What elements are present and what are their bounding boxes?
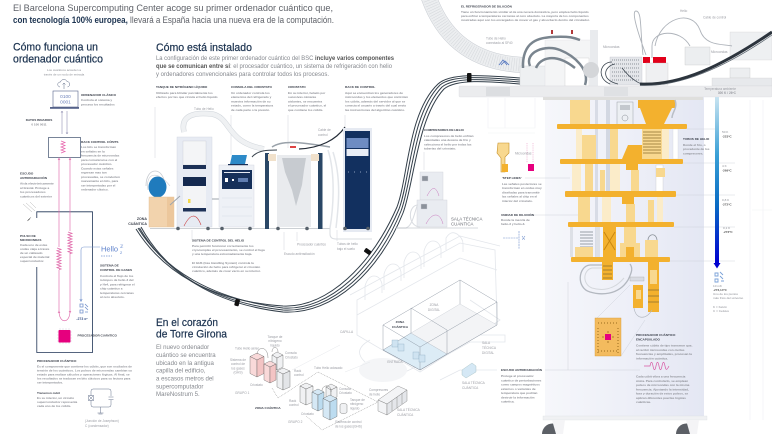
- panel: refrigerador: [428, 0, 772, 434]
- compressors panel: [330, 128, 482, 239]
- iso labels: Sistema de: [230, 358, 246, 362]
- text: refrigerador de dilución: EL REFRIGERADOR DE DILUCIÓN: [461, 4, 512, 8]
- text: escudo: ESCUDO ANTIRRADIACIÓN: [501, 368, 542, 372]
- iso labels: ZONA CUÁNTICA: [255, 405, 281, 410]
- arrows: datos: [61, 111, 68, 134]
- iso labels: Tanque de: [350, 398, 365, 402]
- blue line: hello: [80, 247, 100, 301]
- heading: [156, 317, 228, 340]
- text: procesador encapsulado: fase y duración de estos pulsos, se: [636, 392, 688, 396]
- labels top: Helio: [680, 9, 687, 13]
- label: temperatura ambiente: Temperatura ambiente: [704, 87, 736, 91]
- iso labels: Criostato: [250, 383, 263, 387]
- small labels: Procesador cuántico: [297, 242, 326, 246]
- iso labels: nitrógeno: [268, 339, 282, 343]
- floor: [150, 228, 330, 230]
- label: sistema control helio: circulación de helio para refrigerar el criostato: [192, 265, 260, 269]
- label: rack control cúbits: RACK CONTROL CÚBITS: [81, 140, 118, 144]
- text: refrigerador de dilución: Tiene un funcionamiento similar al de una nevera doméstica, pero emplea helio líquido: [461, 10, 589, 14]
- iso labels: Consola: [285, 351, 297, 355]
- text: entrada: través de un nodo de entrada: [44, 72, 84, 76]
- label: rack de control: microondas y los elementos que controlan: [345, 95, 408, 99]
- iso labels: Compresores: [369, 388, 388, 392]
- label: rack de control: Aquí se encuentran los generadores de: [345, 91, 403, 95]
- iso labels: líquido: [270, 344, 280, 348]
- label: criostato: En su interior, helado por: [288, 91, 326, 95]
- text: procesador encapsulado: ENCAPSULADO: [636, 338, 660, 342]
- label: zona cuántica: CUÁNTICA: [128, 221, 147, 226]
- body: El nuevo ordenador: [156, 344, 209, 351]
- header text: El Barcelona Supercomputing Center acoge su primer ordenador cuántico que,: [13, 3, 333, 14]
- label: rack de control: los cúbits, además del servidor al que se: [345, 99, 405, 103]
- zone labels: SALA: [482, 341, 490, 345]
- band below platform: [543, 97, 703, 100]
- heading: cómo funciona: ordenador cuántico: [13, 54, 103, 66]
- label: sala técnica cuántica: CUÁNTICA: [451, 222, 474, 226]
- label: rack de control: RACK DE CONTROL: [345, 85, 375, 89]
- label: cable de control: control: [318, 133, 328, 137]
- fridge body: [545, 97, 704, 417]
- hello signal: 2: [120, 250, 123, 255]
- label: tubo de helio: Tubo de Helio: [194, 107, 214, 111]
- text: compresores de helio: COMPRESORES DE HELIO: [424, 128, 464, 132]
- label: sistema control gases: y He4, para refrigerar el: [100, 282, 135, 286]
- label: datos binarios: 0 100 0011: [31, 122, 47, 126]
- label: tanque: efectos por las que circula el helio líquido: [156, 95, 218, 99]
- iso labels: de helio: [369, 392, 380, 396]
- temperature labels: [722, 130, 733, 234]
- label: pulso de microondas: especial de material: [20, 255, 50, 259]
- label: consola: muestra información de su: [231, 99, 271, 103]
- text: procesador cuántico: ser interpretados.: [37, 380, 63, 384]
- labels top: Microondas: [603, 45, 620, 49]
- top machinery: [520, 30, 599, 86]
- label: rack control cúbits: para comunicarse con el: [81, 158, 117, 162]
- zone labels: ENTRADA: [387, 360, 403, 364]
- label: pulso de microondas: superconductor.: [20, 259, 44, 263]
- icon: dilución: [503, 231, 525, 249]
- label: rack control cúbits: Cuando estas señales: [81, 166, 114, 170]
- leaders: [292, 345, 370, 372]
- iso labels: los gases: [231, 366, 245, 370]
- panel: torre girona: [156, 233, 505, 430]
- body: supercomputador: [156, 384, 203, 390]
- label: sala técnica cuántica: SALA TÉCNICA: [451, 216, 482, 222]
- text: unidad de dilución: UNIDAD DE DILUCIÓN: [501, 213, 534, 217]
- label: rack de control: las instrucciones del algoritmo cuántico.: [345, 108, 405, 112]
- hello signal: ℤ: [120, 244, 124, 249]
- label: tanque: Utilizado para blindar parcialmente los: [156, 91, 213, 95]
- label: criostato: CRIOSTATO: [288, 85, 306, 89]
- icon: wave: [644, 362, 669, 370]
- label: rack control cúbits: ordenador clásico.: [81, 188, 109, 192]
- small labels: Escudo antirradiación: [284, 252, 315, 256]
- pink microwave lines: [57, 158, 72, 321]
- label: sistema control gases: temperaturas cercanas: [100, 291, 134, 295]
- text: entrada: Los cuánticos acceden a: [47, 68, 81, 72]
- cable bundle: [136, 76, 520, 312]
- label: pulso de microondas: ondas viaja a través: [20, 247, 50, 251]
- background grid: [488, 98, 772, 420]
- text: step lines: las señales al chip en el: [502, 195, 537, 199]
- label: sistema control gases: CONTROL DE GASES: [100, 268, 132, 272]
- body: capilla del edificio,: [156, 368, 206, 374]
- label: rack de control: conecta el usuario a través del cual envía: [345, 104, 406, 108]
- hello signal: [101, 244, 124, 256]
- label: rack control cúbits: procesador cuántico.: [81, 162, 112, 166]
- helium tube: [428, 0, 522, 65]
- text: refrigerador de dilución: mostradas aquí son los encargados de mover el gas y absorberlo dentro del circulador.: [461, 18, 590, 22]
- iso labels: GRUPO 2: [288, 420, 303, 424]
- lower stage: [580, 262, 659, 317]
- icon: frío: [715, 272, 724, 282]
- compressor units: [417, 172, 447, 227]
- small labels: Tubos de helio: [337, 242, 358, 246]
- label: tanque: TANQUE DE NITRÓGENO LÍQUIDO: [156, 85, 207, 89]
- label: consola: elementos del refrigerado y: [231, 95, 272, 99]
- hello signal: Hello: [101, 244, 118, 254]
- temperature labels: -273ºC: [723, 230, 733, 234]
- iso labels: nitrógeno: [350, 402, 364, 406]
- iso labels: Tubo Helio adosado: [314, 366, 343, 370]
- text: step lines: 'STEP LINES': [502, 176, 521, 180]
- iso labels: (GHS): [233, 370, 243, 374]
- body: a escasos metros del: [156, 376, 214, 382]
- iso labels: control: [289, 403, 299, 407]
- leader: [423, 152, 425, 170]
- iso labels: Rack: [289, 399, 296, 403]
- label: ordenador clásico: procesa los resultados: [81, 102, 115, 106]
- label: consola: Un ordenador controla los: [231, 91, 270, 95]
- body: ubicado en la antigua: [156, 360, 215, 367]
- body: cuántico se encuentra: [156, 352, 216, 359]
- label: tubo helio: Tubo de Helio: [486, 36, 506, 40]
- labels top: Cable de control: [703, 16, 727, 20]
- text: procesador encapsulado: aplican diferentes puertas lógicas: [636, 396, 686, 400]
- intro: La configuración de este primer ordenador cuántico del BSC incluye varios componentes: [156, 55, 395, 62]
- rack control: [48, 138, 80, 158]
- iso labels: Tubo Helio aéreo: [235, 346, 260, 350]
- zone labels: SALA TÉCNICA: [397, 408, 420, 412]
- text: procesador cuántico: PROCESADOR CUÁNTICO: [37, 359, 76, 363]
- compressors: [378, 386, 407, 415]
- label: criostato: aislantes, se encuentra: [288, 99, 322, 103]
- label: sistema control helio: cryocumplas el procesamiento, se control el fuga: [192, 248, 265, 252]
- label: sistema control gases: SISTEMA DE: [100, 264, 119, 268]
- criostato: [252, 127, 345, 229]
- label: step lines icon: [497, 143, 534, 172]
- heading: de Torre Girona: [156, 328, 228, 340]
- zone labels: [340, 303, 497, 417]
- text: escudo: cuántica.: [501, 400, 515, 404]
- wheels: [176, 227, 370, 230]
- text: procesador cuántico: estado para realizar cálculos y operaciones lógicas. Al final, se: [37, 372, 130, 376]
- text: 10 mk: -273,14ºC: [713, 288, 728, 292]
- zone labels: TÉCNICA: [482, 345, 497, 350]
- temperature labels: 4 K: [722, 164, 727, 168]
- label: sistema control gases: al cero absoluto.: [100, 295, 125, 299]
- text: escudo: como campos magnéticos: [501, 382, 540, 386]
- iso labels: líquido: [350, 406, 360, 410]
- iso labels: Consola: [339, 387, 351, 391]
- text: procesador encapsulado: única. Para controlarlo, se emplean: [636, 379, 688, 383]
- small labels: bajo el suelo: [337, 247, 355, 251]
- text: tubos de helio: TUBOS DE HELIO: [683, 137, 709, 141]
- perforated box and lines: [601, 11, 772, 86]
- label: sistema control gases: Controla el flujo de los: [100, 274, 134, 278]
- label: criostato: el procesador cuántico, el: [288, 104, 326, 108]
- text: procesador encapsulado: frecuencia. Ajustando la intensidad,: [636, 387, 689, 391]
- label: temperatura ambiente: 300 K / 26ºC: [718, 91, 737, 95]
- body: MareNostrum 5.: [156, 391, 200, 398]
- header text: con tecnología 100% europea, llevará a España hacia una nueva era de la computación.: [13, 15, 334, 26]
- gold assembly: [557, 100, 687, 262]
- label: rack control cúbits: nuevamente en bits, para: [81, 179, 118, 183]
- iso labels: Sistema de control: [335, 420, 361, 424]
- label: sistema control helio: y una temperatura extremadamente baja.: [192, 252, 252, 256]
- text: refrigerador de dilución: para enfriar a temperaturas cercanas al cero absoluto. La mayoría de los componentes: [461, 14, 589, 18]
- header text: [13, 3, 334, 26]
- temperature bar: [714, 97, 720, 268]
- label: consola: de cada parte o la presión.: [231, 108, 270, 112]
- temperature: -273 oº: [76, 317, 88, 321]
- leaders chip: [525, 178, 645, 370]
- base: [543, 416, 707, 420]
- text: step lines: Las señales posteriores se: [502, 182, 542, 186]
- intro line 2: que se comunican entre sí: el procesador cuántico, un sistema de refrigeración con helio: [156, 63, 393, 70]
- text: tubos de helio: Donde el frío, o: [683, 143, 706, 147]
- iso labels: Criostato: [301, 412, 314, 416]
- iso labels: Criostato: [285, 356, 298, 360]
- text: procesador encapsulado: al recibir microondas con ciertas: [636, 348, 685, 352]
- label: rack control cúbits: ser interpretadas por el: [81, 183, 116, 187]
- group 2: [300, 383, 347, 420]
- label: rack control cúbits: procesadas, se convierten: [81, 175, 120, 179]
- label: sistema control helio: Para permitir funcionar correctamente los: [192, 244, 254, 248]
- iso labels: [230, 335, 389, 428]
- text: transmon: superconductor representa: [37, 400, 78, 404]
- zone labels: DIGITAL: [428, 308, 440, 312]
- label: escudo antirradiación: los procesadores: [20, 190, 46, 194]
- icon: chip: [57, 328, 72, 344]
- label: escudo antirradiación: ESCUDO: [20, 172, 33, 176]
- labels top: [603, 9, 728, 54]
- iso labels: de los gases(GHS): [335, 424, 362, 428]
- shield box: [37, 212, 92, 352]
- zone labels: ZONA: [396, 320, 404, 324]
- text: procesador encapsulado: información cuántica.: [636, 356, 668, 360]
- text: compresores de helio: Los compresores de helio enfrían: [424, 134, 474, 138]
- chapel: [350, 233, 505, 382]
- text: step lines: interior del criostato.: [502, 199, 533, 203]
- iso labels: Rack: [294, 369, 301, 373]
- temperature labels: 50 K: [722, 130, 728, 134]
- text: procesador encapsulado: PROCESADOR CUÁNTICO: [636, 333, 675, 337]
- iso labels: GRUPO 1: [235, 391, 250, 395]
- text: escudo: destruir la información: [501, 395, 535, 399]
- label: step lines icon: Microondas: [515, 152, 532, 156]
- icon: ordenador clásico: [50, 91, 79, 109]
- label: pulso de microondas: Cada uno de estas: [20, 243, 48, 247]
- text: procesador encapsulado: cuánticas.: [636, 400, 651, 404]
- text: escudo: Protege al procesador: [501, 374, 534, 378]
- label: rack control cúbits: Los bits se transforman: [81, 145, 116, 149]
- text: transmon: Es su interior, un circuito: [37, 396, 74, 400]
- text: 10 mk: K = Kelvin: [713, 305, 727, 309]
- label: escudo antirradiación: ANTIRRADIACIÓN: [20, 175, 48, 180]
- group 1: [250, 348, 290, 390]
- label: rack control cúbits: en señales en la: [81, 149, 105, 153]
- label: sistema control gases: isótopos de helio-3 del: [100, 278, 134, 282]
- icon: ordenador clásico: 0001: [60, 100, 71, 106]
- text: step lines: diseñadas para transmitir: [502, 190, 540, 194]
- label: datos binarios: DATOS BINARIOS: [26, 118, 52, 122]
- label: pulso de microondas: PULSO DE: [20, 234, 36, 238]
- label: sistema control helio: El GHS (Gas Handling System) controla la: [192, 261, 254, 265]
- icon: pump: [499, 60, 509, 65]
- zone labels: ZONA: [430, 303, 438, 307]
- text: escudo: temperatura que podrían: [501, 391, 538, 395]
- text: 10 mk: Uno de los puntos: [713, 292, 738, 296]
- icon: cold: [80, 304, 88, 313]
- label: consola: CONSOLA DEL CRIOSTATO: [231, 85, 272, 89]
- rack de control: [343, 128, 372, 232]
- text: transmon: Transmon cubit: [37, 391, 60, 395]
- text: procesador cuántico: tensión de los cuánticos. Los pulsos de microondas cambian su: [37, 368, 132, 372]
- iso labels: control: [294, 373, 304, 377]
- zone labels: CUÁNTICA: [397, 413, 414, 417]
- zone labels: SALA TÉCNICA: [462, 381, 485, 385]
- zone labels: CUÁNTICA: [462, 386, 479, 390]
- chip encapsulado: [595, 318, 621, 356]
- label: sistema control gases: chip cuántico a: [100, 287, 123, 291]
- tanque de nitrógeno: [146, 171, 174, 227]
- text: procesador encapsulado: pulsos de microondas con la misma: [636, 383, 690, 387]
- iso labels: control de: [231, 362, 245, 366]
- text: procesador encapsulado: Cada cúbit vibra a una frecuencia: [636, 374, 686, 378]
- temperature labels: 0,1 K: [723, 226, 730, 230]
- text: procesador encapsulado: Contiene cúbits de tipo transmon que,: [636, 344, 693, 348]
- label: ordenador clásico: ORDENADOR CLÁSICO: [81, 93, 116, 97]
- temperature lines: [670, 129, 735, 261]
- label: pulso de microondas: de un cableado: [20, 251, 43, 255]
- leader lines: [155, 107, 345, 250]
- label: escudo antirradiación: Aísla electrónicamente: [20, 182, 54, 186]
- text: escudo: cuántico de perturbaciones: [501, 378, 542, 382]
- clamps: [234, 73, 472, 306]
- text: step lines: transforman en ondas muy: [502, 186, 542, 190]
- text: compresores de helio: selecciona el helio por todas las: [424, 142, 472, 146]
- dotted connectors: [272, 372, 378, 430]
- small equipment in room: [392, 340, 425, 362]
- small blue compressors: [462, 363, 476, 378]
- text: procesador encapsulado: frecuencias y amplitudes, procesan la: [636, 352, 692, 356]
- text: 10 mk: C = Celsius: [713, 309, 729, 313]
- text: unidad de dilución: helio-3 y helio-3.: [501, 222, 525, 226]
- heading: En el corazón: [156, 317, 218, 329]
- labels top: Microondas: [711, 50, 728, 54]
- text: tubos de helio: procedente de los: [683, 147, 710, 151]
- consola: [219, 155, 254, 227]
- rack nitrógeno: [170, 137, 220, 227]
- text: transmon: cada uno de los cúbits.: [37, 404, 71, 408]
- wheels: [542, 420, 699, 434]
- temperature labels: -269ºC: [722, 168, 732, 172]
- text: 10 mk: 10 mK: [713, 284, 722, 288]
- heading: cómo funciona: Cómo funciona un: [13, 42, 98, 54]
- intro line 3: y ordenadores convencionales para controlar todos los procesos.: [156, 71, 329, 78]
- label: rack control cúbits: frecuencia de microondas: [81, 154, 120, 158]
- iso labels: Tanque de: [268, 335, 282, 339]
- pipes: [330, 205, 420, 239]
- label: escudo antirradiación: al tiraxial. Protege a: [20, 186, 50, 190]
- label: escudo antirradiación: cuánticos del exterior: [20, 194, 53, 198]
- zone labels: DIGITAL: [482, 351, 494, 355]
- tubo de helio: [183, 113, 264, 149]
- label: procesador: PROCESADOR CUÁNTICO: [78, 332, 117, 338]
- label: ordenador clásico: Controla el sistema y: [81, 98, 112, 102]
- temperature labels: -223ºC: [722, 134, 732, 138]
- label: rack control cúbits: regresan mas tan: [81, 170, 107, 174]
- label: josephson: (Junción de Josephson): [85, 419, 119, 423]
- floor: [396, 227, 478, 229]
- label: zona cuántica: ZONA: [137, 217, 147, 221]
- panel: cómo está instalado: [128, 42, 520, 312]
- circuit: [88, 389, 114, 414]
- icon: ordenador clásico: 0100: [60, 95, 71, 100]
- text: 10 mk: más fríos del universo: [713, 296, 744, 300]
- label: tubo helio: conectado al SF40: [486, 41, 513, 45]
- label: josephson: C (condensador): [85, 424, 109, 428]
- text: procesador cuántico: Es el componente que contiene los cúbits, que son oscilados de: [37, 364, 132, 368]
- panel: cómo funciona: [13, 42, 135, 428]
- label: criostato: sucesivas cámaras: [288, 95, 316, 99]
- label: pulso de microondas: MICROONDAS: [20, 238, 41, 242]
- text: unidad de dilución: Donde la mezcla de: [501, 218, 530, 222]
- temperature labels: 0,8 K: [722, 198, 729, 202]
- zone labels: CAPILLA: [340, 330, 354, 334]
- temperature labels: -272ºC: [722, 202, 732, 206]
- label: consola: estado, como la temperatura: [231, 104, 273, 108]
- small labels: [284, 242, 358, 256]
- text: escudo: externos o variantes de: [501, 387, 536, 391]
- label: criostato: que contiene los cúbits.: [288, 108, 323, 112]
- text: tubos de helio: compresores.: [683, 151, 703, 155]
- heading: Cómo está instalado: [156, 42, 252, 54]
- label: sistema control helio: SISTEMA DE CONTROL DEL HELIO: [192, 238, 244, 242]
- label: cable de control: Cable de: [318, 128, 331, 132]
- text: compresores de helio: calentadas una decena de frío y: [424, 138, 471, 142]
- zone labels: CUÁNTICA: [392, 324, 409, 329]
- platform: [459, 86, 772, 97]
- heading: cómo funciona: [13, 42, 103, 66]
- icon: cloud: [58, 80, 70, 89]
- radiation arrows: [23, 202, 36, 221]
- text: compresores de helio: tuberías del criostato.: [424, 147, 456, 151]
- text: procesador cuántico: los resultados se traducen en bits clásicos para su lectura para: [37, 376, 131, 380]
- label: sistema control helio: cuántico, además de crear vacío en su interior.: [192, 269, 261, 273]
- glass room: [383, 280, 497, 370]
- iso labels: Criostato: [339, 391, 352, 395]
